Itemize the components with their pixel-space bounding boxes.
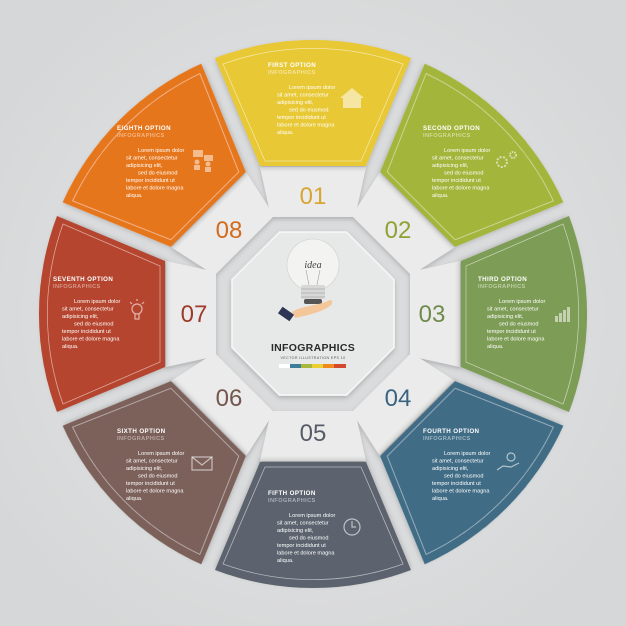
text: fifth option: sit amet, consectetur — [277, 520, 329, 526]
panel: first option — [215, 40, 411, 166]
text: second option: sit amet, consectetur — [432, 156, 484, 162]
numbers — [181, 183, 445, 447]
numbers: 02 — [385, 217, 411, 244]
text: eighth option: EIGHTH OPTION — [117, 125, 171, 132]
text: fourth option: sit amet, consectetur — [432, 458, 484, 464]
text: first option: sit amet, consectetur — [277, 92, 329, 98]
text: seventh option: labore et dolore magna — [62, 336, 120, 342]
text: fifth option: INFOGRAPHICS — [268, 498, 316, 504]
text: fifth option: adipisicing elit, — [277, 528, 314, 534]
text: fourth option: FOURTH OPTION — [423, 428, 480, 435]
text: third option: labore et dolore magna — [487, 336, 545, 342]
panel: third option — [461, 216, 587, 412]
text: fourth option: sed do eiusmod — [444, 474, 484, 480]
text: second option: Lorem ipsum dolor — [444, 148, 490, 154]
numbers: 07 — [181, 301, 207, 328]
center title — [271, 342, 355, 360]
text: third option: aliqua. — [487, 344, 504, 350]
text: sixth option: sit amet, consectetur — [126, 458, 178, 464]
text: seventh option: tempor incididunt ut — [62, 329, 111, 335]
text: seventh option: sed do eiusmod — [74, 322, 114, 328]
text: third option: tempor incididunt ut — [487, 329, 536, 335]
text: sixth option: tempor incididunt ut — [126, 481, 175, 487]
text: first option: Lorem ipsum dolor — [289, 85, 335, 91]
text: eighth option: aliqua. — [126, 193, 143, 199]
text: sixth option: labore et dolore magna — [126, 488, 184, 494]
text: eighth option: tempor incididunt ut — [126, 178, 175, 184]
text: sixth option: Lorem ipsum dolor — [138, 451, 184, 457]
text: fifth option: tempor incididunt ut — [277, 543, 326, 549]
gray number trapezoids — [166, 167, 460, 461]
text: fourth option: INFOGRAPHICS — [423, 436, 471, 442]
text: third option: INFOGRAPHICS — [478, 284, 526, 290]
text: fifth option: Lorem ipsum dolor — [289, 513, 335, 519]
text: sixth option — [117, 428, 184, 502]
panel: fourth option — [348, 349, 576, 577]
text: sixth option: INFOGRAPHICS — [117, 436, 165, 442]
text: eighth option: INFOGRAPHICS — [117, 133, 165, 139]
text: fourth option: tempor incididunt ut — [432, 481, 481, 487]
text: fifth option: labore et dolore magna — [277, 550, 335, 556]
icon: clock — [344, 519, 360, 535]
icon: envelope — [192, 457, 212, 470]
text: sixth option: sed do eiusmod — [138, 474, 178, 480]
panel: fifth option — [215, 462, 411, 588]
text: eighth option: adipisicing elit, — [126, 163, 163, 169]
text: fourth option: labore et dolore magna — [432, 488, 490, 494]
text: eighth option: Lorem ipsum dolor — [138, 148, 184, 154]
numbers: 05 — [300, 420, 326, 447]
text: third option: sit amet, consectetur — [487, 306, 539, 312]
numbers: 03 — [419, 301, 445, 328]
text: sixth option: adipisicing elit, — [126, 466, 163, 472]
text: third option: Lorem ipsum dolor — [499, 299, 545, 305]
center title: VECTOR ILLUSTRATION EPS 10 — [280, 356, 346, 360]
text: first option — [268, 62, 335, 136]
icon: hand with dollar — [497, 453, 519, 470]
text: eighth option: sed do eiusmod — [138, 170, 178, 176]
icon: light bulb with hand — [278, 239, 339, 321]
text: third option: sed do eiusmod — [499, 322, 538, 328]
text: fifth option — [268, 490, 335, 564]
text: first option: labore et dolore magna — [277, 122, 335, 128]
icon: light bulb with hand: idea — [304, 260, 322, 271]
icon: bulb — [130, 299, 144, 319]
numbers: 01 — [300, 183, 326, 210]
text: eighth option — [117, 125, 184, 199]
color bar — [279, 364, 346, 368]
text: second option: labore et dolore magna — [432, 186, 490, 192]
icon: house — [340, 88, 364, 108]
text: second option: INFOGRAPHICS — [423, 133, 471, 139]
text: fourth option: aliqua. — [432, 496, 449, 502]
text: first option: sed do eiusmod — [289, 108, 328, 114]
text: eighth option: sit amet, consectetur — [126, 156, 178, 162]
panel: eighth option — [50, 51, 278, 279]
text: seventh option: adipisicing elit, — [62, 314, 99, 320]
panel: second option — [348, 51, 576, 279]
center title: INFOGRAPHICS — [271, 342, 355, 354]
text: second option: sed do eiusmod — [444, 170, 484, 176]
text: fourth option — [423, 428, 490, 502]
text: third option: THIRD OPTION — [478, 276, 527, 283]
text: first option: aliqua. — [277, 130, 294, 136]
text: first option: INFOGRAPHICS — [268, 70, 316, 76]
text: sixth option: aliqua. — [126, 496, 143, 502]
icon: chart — [555, 307, 570, 322]
text: fourth option: adipisicing elit, — [432, 466, 469, 472]
text: second option — [423, 125, 490, 199]
text: seventh option: INFOGRAPHICS — [53, 284, 101, 290]
center octagon — [232, 232, 394, 395]
text: fourth option: Lorem ipsum dolor — [444, 451, 490, 457]
numbers: 04 — [385, 385, 411, 412]
text: third option: adipisicing elit, — [487, 314, 524, 320]
text: third option — [478, 276, 545, 350]
text: seventh option: aliqua. — [62, 344, 79, 350]
panel: seventh option — [39, 216, 165, 412]
text: first option: tempor incididunt ut — [277, 115, 326, 121]
icon: gears — [497, 152, 516, 167]
numbers: 06 — [216, 385, 242, 412]
numbers: 08 — [216, 217, 242, 244]
text: eighth option: labore et dolore magna — [126, 186, 184, 192]
text: first option: adipisicing elit, — [277, 100, 314, 106]
text: second option: tempor incididunt ut — [432, 178, 481, 184]
text: fifth option: sed do eiusmod — [289, 536, 328, 542]
text: second option: aliqua. — [432, 193, 449, 199]
text: second option: SECOND OPTION — [423, 125, 480, 132]
icon: people — [193, 150, 213, 172]
text: seventh option: SEVENTH OPTION — [53, 276, 113, 283]
text: first option: FIRST OPTION — [268, 62, 316, 69]
text: seventh option: Lorem ipsum dolor — [74, 299, 120, 305]
text: seventh option: sit amet, consectetur — [62, 306, 114, 312]
text: fifth option: FIFTH OPTION — [268, 490, 316, 497]
backing circle — [51, 52, 575, 576]
text: second option: adipisicing elit, — [432, 163, 469, 169]
text: fifth option: aliqua. — [277, 558, 294, 564]
text: seventh option — [53, 276, 120, 350]
panel: sixth option — [50, 349, 278, 577]
text: sixth option: SIXTH OPTION — [117, 428, 166, 435]
